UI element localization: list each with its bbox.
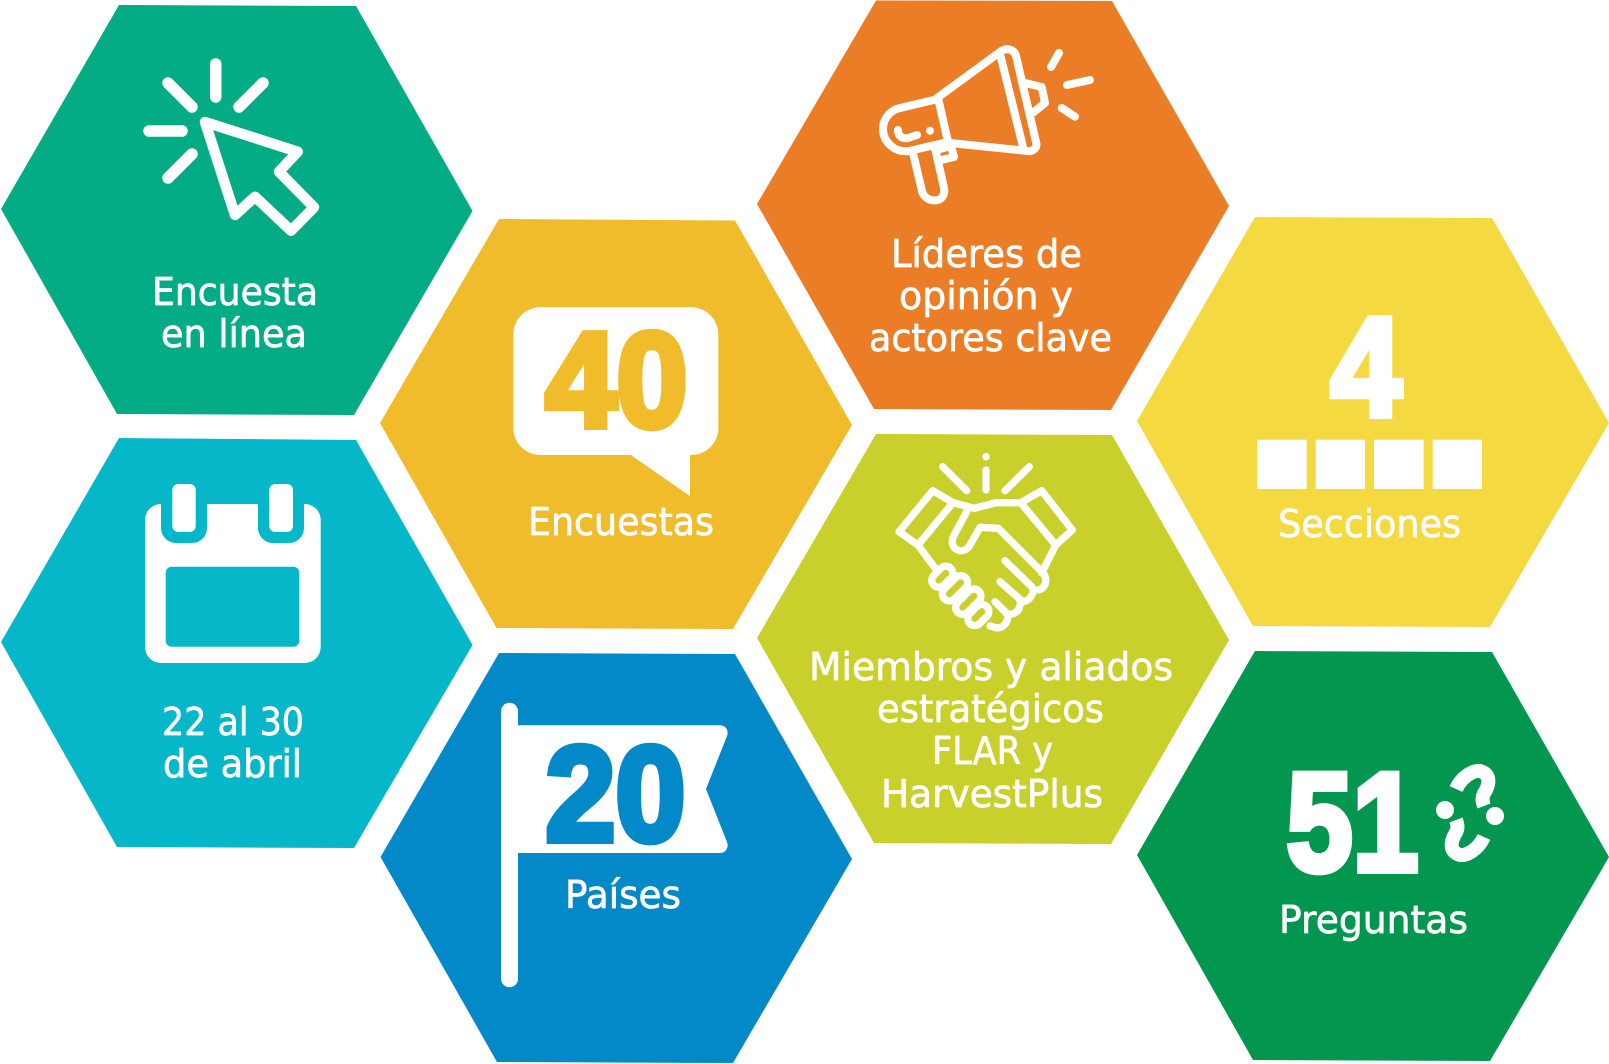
icon: speech bubble with 40 — [513, 304, 718, 496]
text: 22 al 30 de abril: de abril — [163, 742, 302, 787]
panel: miembros y aliados — [757, 434, 1229, 844]
text: Encuestas: Encuestas — [528, 500, 714, 545]
text: Miembros y aliados estratégicos FLAR y HarvestPlus — [809, 645, 1173, 817]
text: Líderes de opinión y actores clave — [869, 232, 1112, 361]
icon: flag with 20: 20 — [546, 718, 686, 870]
text: Líderes de opinión y actores clave: opinión y — [899, 274, 1073, 319]
panel: 51 preguntas — [1137, 651, 1609, 1061]
text: Encuesta en línea: Encuesta — [152, 270, 318, 315]
text: Encuesta en línea: en línea — [161, 312, 307, 357]
text: Líderes de opinión y actores clave: actores clave — [869, 316, 1112, 361]
text: Miembros y aliados estratégicos FLAR y HarvestPlus: HarvestPlus — [881, 772, 1103, 817]
panel: 4 secciones — [1137, 217, 1609, 627]
panel: líderes de opinión — [757, 0, 1229, 410]
text: Encuesta en línea — [152, 270, 318, 357]
icon: megaphone — [883, 49, 1090, 200]
icon: handshake — [899, 453, 1072, 628]
text: 22 al 30 de abril: 22 al 30 — [162, 700, 304, 745]
icon: calendar — [145, 484, 321, 663]
number: 51: 51 — [1286, 744, 1418, 900]
text: Miembros y aliados estratégicos FLAR y HarvestPlus: FLAR y — [932, 729, 1053, 774]
icon: flag with 20 — [501, 703, 728, 987]
text: Miembros y aliados estratégicos FLAR y HarvestPlus: estratégicos — [877, 687, 1104, 732]
text: Secciones: Secciones — [1278, 502, 1461, 547]
icon: question marks — [1436, 771, 1504, 855]
text: Líderes de opinión y actores clave: Líderes de — [891, 232, 1082, 277]
panel: 40 encuestas — [380, 219, 852, 629]
panel: encuesta en línea — [1, 5, 472, 415]
panel: fechas — [1, 438, 472, 848]
icon: four squares — [1257, 440, 1482, 489]
panel: 20 países — [380, 653, 852, 1063]
text: 22 al 30 de abril — [162, 700, 304, 787]
icon: speech bubble with 40: 40 — [546, 304, 688, 456]
text: Miembros y aliados estratégicos FLAR y HarvestPlus: Miembros y aliados — [809, 645, 1173, 690]
number: 4: 4 — [1330, 288, 1402, 446]
icon: cursor click — [149, 64, 314, 231]
text: Preguntas: Preguntas — [1279, 898, 1468, 943]
text: Países: Países — [565, 873, 681, 918]
